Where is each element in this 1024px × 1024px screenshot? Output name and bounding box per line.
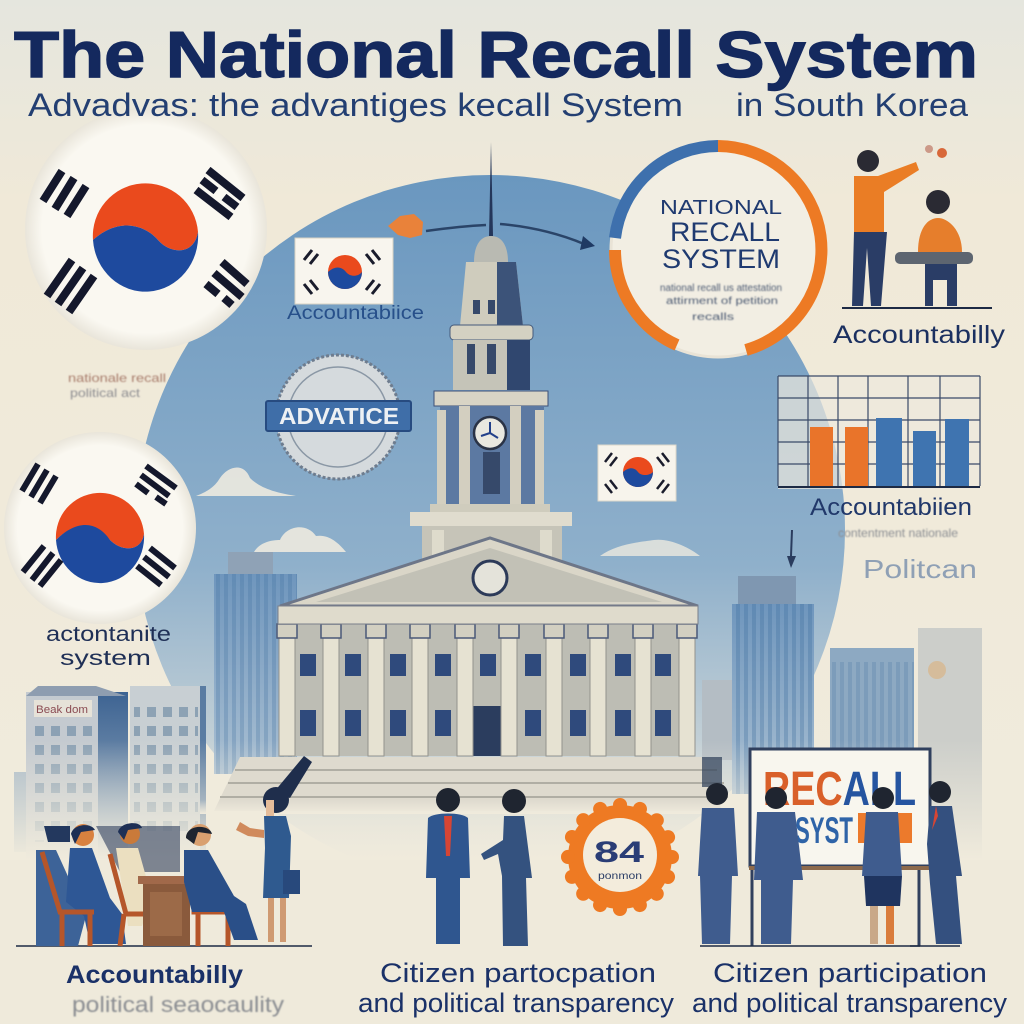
large flag emblem lower left [4, 432, 196, 624]
desk [143, 880, 190, 946]
main building pediment [278, 538, 698, 624]
recall system ring badge: RECALL [670, 217, 780, 247]
subtitle: in South Korea [736, 87, 968, 123]
man two [66, 848, 126, 944]
chair three [194, 880, 234, 946]
distant buildings left [14, 686, 206, 862]
man four [184, 850, 258, 940]
advantage stamp badge: ADVATICE [279, 403, 399, 429]
small text smudge, left [68, 371, 166, 400]
advantage stamp badge [266, 355, 411, 479]
people at board [698, 781, 962, 946]
main building colonnade [277, 624, 697, 756]
recall system board: SYST [795, 810, 853, 851]
background skyscraper left [214, 552, 297, 774]
orange seal badge: ponmon [598, 871, 642, 882]
bottom caption centre: Citizen partocpation [380, 958, 656, 988]
chair one [42, 852, 94, 946]
two men talking [426, 788, 532, 946]
person two [765, 787, 787, 809]
orange seal badge: 84 [594, 836, 644, 869]
back rows of people [36, 850, 86, 946]
recall system ring badge: SYSTEM [662, 244, 780, 274]
right side politcan label: Politcan [863, 554, 977, 584]
bottom caption left: Accountabilly [66, 961, 243, 989]
people at desk icon: Accountabilly [833, 321, 1006, 349]
bar chart [778, 376, 980, 489]
right side politcan label [863, 554, 977, 679]
orange splash and arrow [388, 214, 595, 250]
recall system ring badge: NATIONAL [660, 197, 782, 219]
subtitle: Advadvas: the advantiges kecall System [28, 87, 683, 123]
bottom caption centre [358, 958, 675, 1018]
recall system ring badge: recalls [692, 312, 734, 323]
orange seal badge [568, 805, 672, 909]
small flag with accountability label [287, 238, 424, 324]
person three [872, 787, 894, 809]
bottom caption left: political seaocaulity [72, 992, 284, 1017]
distant buildings right [702, 628, 982, 868]
stairs [200, 757, 740, 814]
chart caption: contentment nationale [838, 526, 958, 540]
woman standing [274, 756, 312, 798]
people at desk icon [833, 145, 1006, 349]
background skyscraper right [732, 530, 814, 794]
floor line [16, 945, 312, 947]
recall system board: RECALL [763, 763, 916, 816]
ground fade [0, 740, 1024, 1024]
title: The National Recall System [14, 18, 978, 91]
sky circle backdrop [135, 175, 845, 885]
small flag near tower [598, 445, 676, 501]
person four [929, 781, 951, 803]
distant buildings left: Beak dom [36, 704, 88, 716]
woman in cream jacket [116, 848, 152, 926]
bottom caption right [692, 958, 1008, 1018]
bottom caption centre: and political transparency [358, 988, 675, 1018]
label: actontanite system [46, 623, 171, 670]
small text smudge, left: nationale recall [68, 371, 166, 385]
recall system ring badge [611, 143, 825, 357]
label: actontanite system: actontanite [46, 623, 171, 646]
large flag emblem top left [25, 108, 267, 350]
chart caption: Accountabiien [810, 494, 972, 521]
person one [706, 783, 728, 805]
recall system ring badge: attirment of petition [666, 296, 778, 307]
clock tower [410, 142, 572, 568]
subtitle [28, 87, 968, 123]
small flag with accountability label: Accountabiice [287, 303, 424, 324]
clouds [196, 467, 700, 556]
bottom caption left [66, 961, 284, 1017]
people: council meeting [16, 756, 312, 946]
bottom caption right: Citizen participation [713, 958, 987, 988]
label: actontanite system: system [60, 647, 151, 670]
chart caption [810, 494, 972, 540]
recall system board [700, 749, 931, 946]
bottom caption right: and political transparency [692, 988, 1008, 1018]
recall system ring badge: national recall us attestation [660, 283, 782, 294]
small text smudge, left: political act [70, 386, 141, 400]
